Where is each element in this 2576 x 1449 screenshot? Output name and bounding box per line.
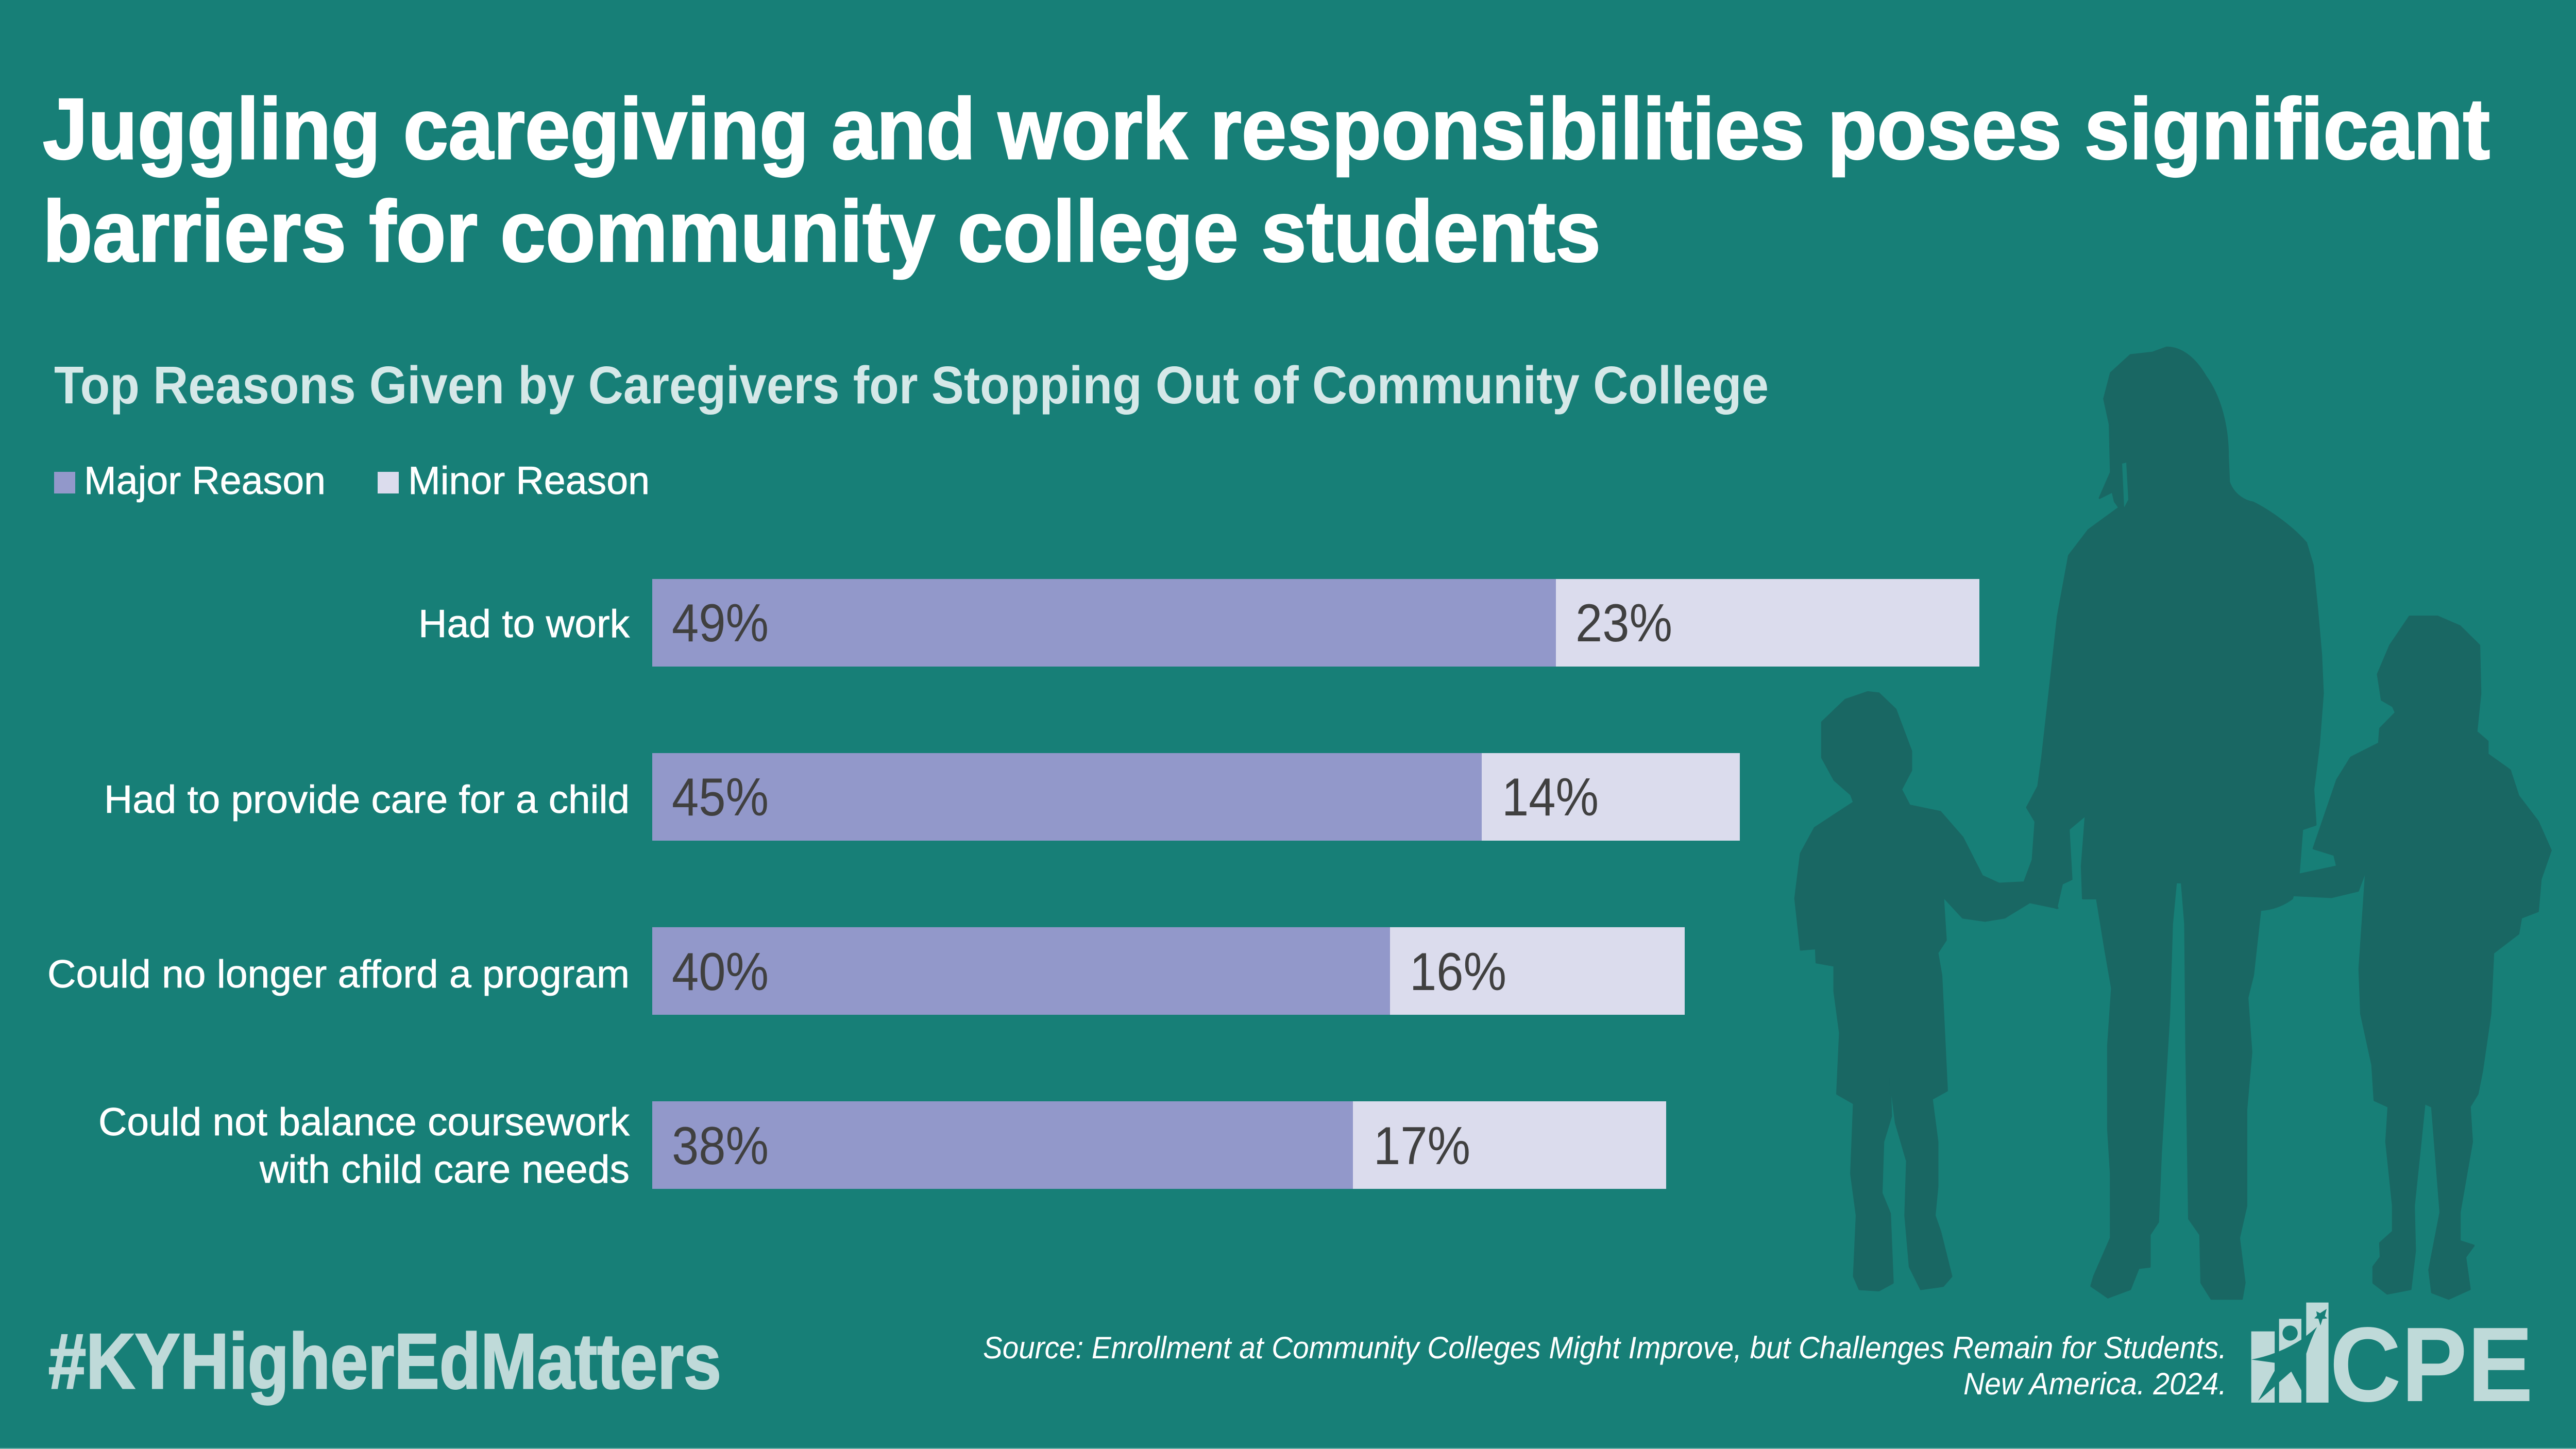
- icon: right child silhouette: [2292, 617, 2551, 1299]
- title: [43, 80, 2490, 280]
- row: had to work: [418, 579, 1979, 667]
- row label: Had to provide care for a child: [104, 778, 630, 822]
- title: barriers for community college students: [43, 183, 1601, 280]
- row: balance coursework: [98, 1100, 1666, 1191]
- bar: minor 14%: [1482, 753, 1740, 841]
- value 45%: 45%: [672, 768, 769, 827]
- hashtag: #KYHigherEdMatters: [48, 1318, 721, 1405]
- source note: [983, 1331, 2227, 1401]
- bar: minor 16%: [1390, 927, 1685, 1015]
- row label: [98, 1100, 630, 1191]
- chart subtitle: Top Reasons Given by Caregivers for Stopping Out of Community College: [54, 355, 1769, 415]
- legend swatch: major reason: [54, 472, 75, 493]
- value 38%: 38%: [672, 1116, 769, 1176]
- source note: New America. 2024.: [1963, 1367, 2227, 1401]
- bar: minor 23%: [1556, 579, 1979, 667]
- logo wordmark: CPE: [2330, 1305, 2533, 1424]
- value 23%: 23%: [1575, 593, 1672, 653]
- legend: [54, 459, 650, 503]
- legend label: major reason: Major Reason: [84, 459, 326, 503]
- bar: major 49%: [652, 579, 1556, 667]
- bar: minor 17%: [1353, 1101, 1666, 1189]
- icon: left child silhouette: [1795, 692, 2058, 1290]
- icon: woman silhouette: [2024, 348, 2323, 1299]
- value 17%: 17%: [1374, 1116, 1470, 1176]
- title: Juggling caregiving and work responsibilities poses significant: [43, 80, 2490, 177]
- icon: rising figure bars: [2251, 1303, 2329, 1403]
- row: afford a program: [47, 927, 1685, 1015]
- value 16%: 16%: [1410, 942, 1506, 1002]
- legend label: minor reason: Minor Reason: [408, 459, 650, 503]
- legend swatch: minor reason: [378, 472, 399, 493]
- row: care for a child: [104, 753, 1740, 841]
- bar: major 38%: [652, 1101, 1353, 1189]
- logo: CPE: [2251, 1303, 2533, 1424]
- value 49%: 49%: [672, 593, 769, 653]
- value 40%: 40%: [672, 942, 769, 1002]
- silhouette: woman holding hands with two children: [1795, 348, 2551, 1299]
- row label: Had to work: [418, 602, 630, 646]
- row label: with child care needs: [259, 1148, 630, 1191]
- row label: Could not balance coursework: [98, 1100, 630, 1144]
- value 14%: 14%: [1502, 768, 1599, 827]
- source note: Source: Enrollment at Community Colleges Might Improve, but Challenges Remain for Students.: [983, 1331, 2227, 1365]
- bar: major 40%: [652, 927, 1390, 1015]
- bar: major 45%: [652, 753, 1482, 841]
- bar chart: [47, 579, 1979, 1191]
- row label: Could no longer afford a program: [47, 952, 630, 996]
